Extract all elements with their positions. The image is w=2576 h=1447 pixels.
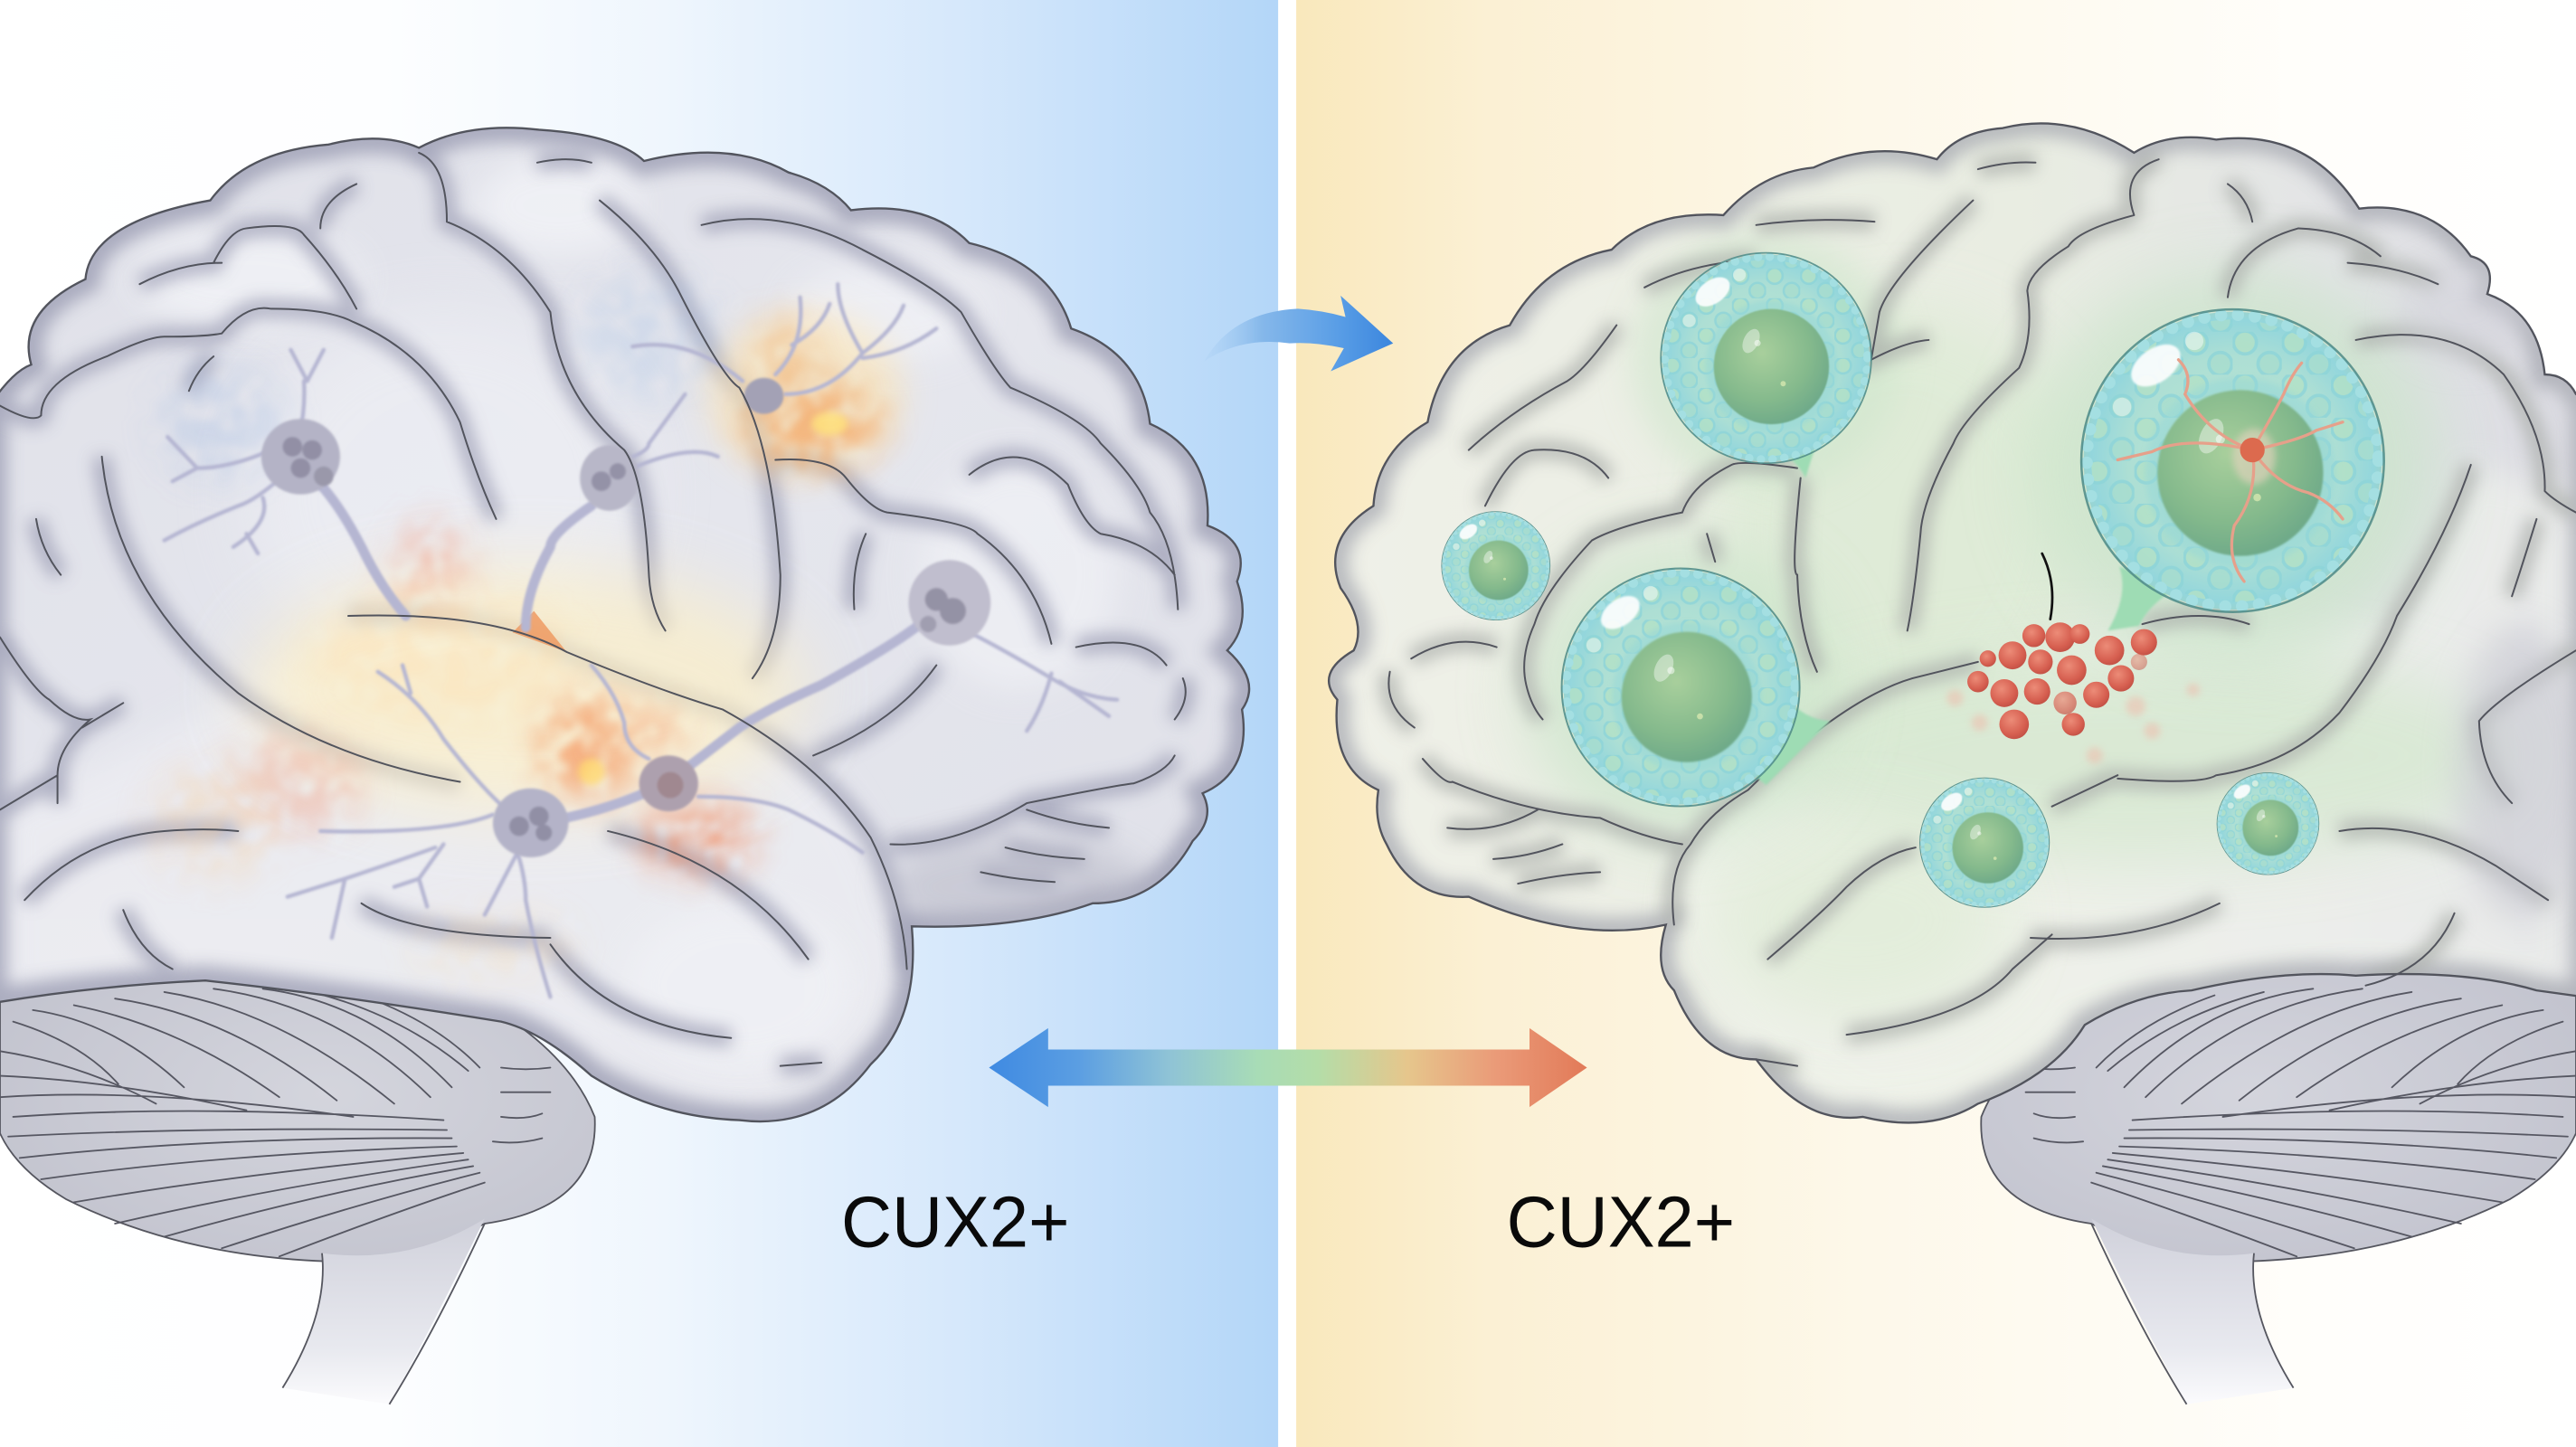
- left cerebellum and brainstem: [0, 956, 595, 1404]
- left cerebrum body: [0, 128, 1249, 1121]
- curved arrow: left to right: [1204, 296, 1393, 371]
- cyst stalks: [1741, 411, 2177, 785]
- cyst: large with stellate cell: [2081, 309, 2384, 612]
- label: left CUX2+: CUX2+: [841, 1181, 1069, 1262]
- cyst: lower left large: [1562, 569, 1800, 807]
- double-headed gradient arrow: [989, 1028, 1587, 1107]
- right cerebrum body: [1329, 123, 2576, 1122]
- left brain: disturbed neurons: [0, 128, 1249, 1404]
- stellate cell: [2117, 360, 2343, 582]
- right cerebellum and brainstem: [1981, 956, 2576, 1404]
- neuron branches: [165, 284, 1117, 997]
- heat glow patches: [147, 274, 904, 978]
- black marker line: [2042, 553, 2052, 619]
- left panel: blue gradient background: [0, 0, 1278, 1447]
- label: right CUX2+: CUX2+: [1507, 1181, 1735, 1262]
- right brain: organoid cysts: [1329, 123, 2576, 1404]
- cyst: temporal centre: [1920, 778, 2050, 907]
- cyst: small far left: [1442, 512, 1550, 620]
- cyst: temporal right: [2217, 772, 2319, 875]
- neuron cell bodies: [261, 378, 990, 857]
- red cell cluster: [1946, 622, 2200, 763]
- cyst: upper left: [1661, 253, 1871, 463]
- right panel: cream gradient background: [1296, 0, 2576, 1447]
